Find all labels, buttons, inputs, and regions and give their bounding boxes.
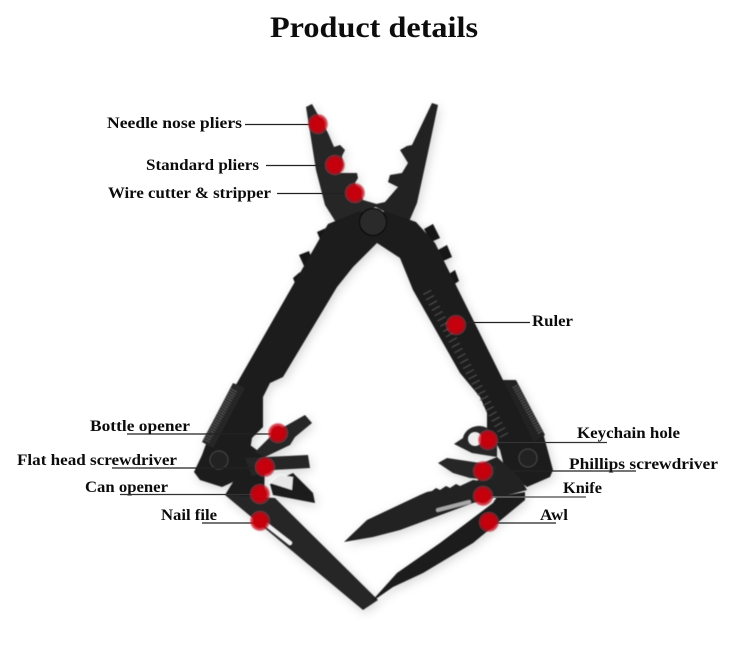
ruler markings: [427, 292, 505, 437]
title: Product details: [270, 11, 478, 44]
callout: flat head screwdriver: Flat head screwdriver: [17, 452, 177, 469]
callout: ruler: Ruler: [532, 313, 573, 330]
pivot screw: [360, 208, 386, 236]
callout: keychain hole: [477, 425, 680, 451]
left tool hub: [225, 445, 265, 505]
phillips screwdriver: [438, 458, 497, 480]
callout: wire cutter and stripper: [108, 182, 366, 204]
keychain loop: [454, 426, 497, 457]
right tool hub: [478, 457, 527, 498]
nail file slot: [267, 525, 290, 543]
callout: ruler: [445, 313, 573, 336]
callout: needle nose pliers: [107, 113, 329, 135]
callout: standard pliers: [146, 154, 346, 176]
knife slot: [438, 502, 469, 510]
callout: flat head screwdriver: [17, 452, 276, 478]
callout: bottle opener: Bottle opener: [90, 418, 190, 435]
callout: awl: [478, 507, 569, 533]
right hex screw: [519, 449, 537, 467]
callout: nail file: [161, 507, 271, 532]
callout: can opener: Can opener: [85, 479, 168, 496]
knife blade: [344, 480, 497, 542]
multitool illustration: [194, 103, 553, 610]
white gap in can opener: [270, 475, 293, 490]
left hex screw: [210, 451, 228, 469]
left handle: [194, 211, 392, 487]
callout: knife: Knife: [563, 480, 602, 497]
callout: phillips screwdriver: Phillips screwdriver: [569, 456, 718, 473]
bottle opener tool: [255, 415, 312, 457]
callout: wire cutter and stripper: Wire cutter & stripper: [108, 185, 271, 202]
callout: awl: Awl: [540, 507, 569, 524]
callout: can opener: [85, 479, 271, 505]
callout: standard pliers: Standard pliers: [146, 157, 259, 174]
nail file: [225, 495, 378, 610]
right plier jaw: [372, 103, 438, 224]
callout: needle nose pliers: Needle nose pliers: [107, 115, 242, 132]
right sliding grip: [503, 380, 545, 442]
left sliding grip: [202, 383, 245, 448]
callout: knife: [472, 480, 602, 507]
flat head screwdriver: [245, 455, 310, 476]
can opener blade: [270, 473, 315, 503]
callout: phillips screwdriver: [472, 456, 718, 482]
left plier jaw: [306, 104, 380, 224]
left handle side buttons: [293, 228, 331, 288]
awl: [370, 492, 525, 603]
callout: keychain hole: Keychain hole: [577, 425, 680, 442]
right handle: [362, 211, 553, 487]
callout: nail file: Nail file: [161, 507, 217, 524]
callout: bottle opener: [90, 418, 289, 444]
right handle side buttons: [424, 224, 459, 285]
